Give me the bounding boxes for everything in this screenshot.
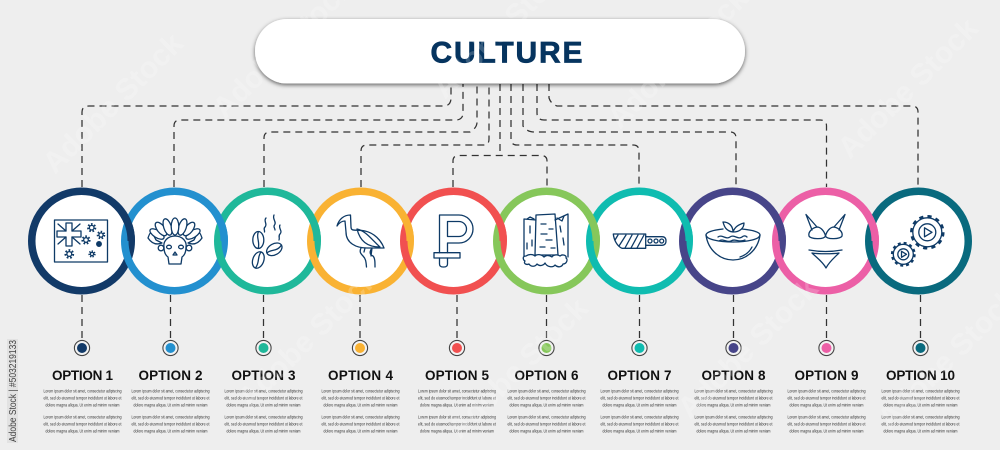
option 2: elit, sed do eiusmod tempor incididunt ut labore et (132, 395, 210, 400)
option 6: dolore magna aliqua. Ut enim ad minim veniam (510, 428, 584, 433)
option 9: elit, sed do eiusmod tempor incididunt ut labore et (788, 395, 866, 400)
faint diagonal watermarks: Adobe Stock (442, 292, 595, 445)
option 5: Lorem ipsum dolor sit amet, consectetur adipiscing (418, 388, 496, 393)
option 4: Lorem ipsum dolor sit amet, consectetur adipiscing (322, 388, 400, 393)
option 10: dolore magna aliqua. Ut enim ad minim veniam (884, 402, 958, 408)
option 6: Lorem ipsum dolor sit amet, consectetur adipiscing (508, 388, 586, 393)
option 9: OPTION 9 (794, 368, 858, 383)
option 8 (694, 340, 773, 433)
option 2: OPTION 2 (138, 368, 202, 383)
option 3 (224, 340, 303, 433)
option 4: Lorem ipsum dolor sit amet, consectetur adipiscing (322, 414, 400, 419)
option 8: elit, sed do eiusmod tempor incididunt ut labore et (694, 421, 773, 426)
option 7: dolore magna aliqua. Ut enim ad minim veniam (602, 428, 677, 433)
icon: australian flag (54, 220, 108, 262)
option 2: dolore magna aliqua. Ut enim ad minim veniam (134, 428, 208, 433)
option 5: OPTION 5 (425, 368, 489, 383)
faint diagonal watermarks: Adobe Stock (232, 262, 385, 415)
option 9: dolore magna aliqua. Ut enim ad minim veniam (790, 428, 864, 433)
icon: crane bird (337, 215, 384, 267)
option 1: Lorem ipsum dolor sit amet, consectetur adipiscing (44, 388, 122, 393)
option 10 (882, 340, 960, 433)
option 3: dolore magna aliqua. Ut enim ad minim veniam (226, 428, 301, 433)
option 6: elit, sed do eiusmod tempor incididunt ut labore et (508, 395, 586, 400)
option 5: Lorem ipsum dolor sit amet, consectetur adipiscing (418, 414, 496, 419)
option 3: dolore magna aliqua. Ut enim ad minim veniam (226, 402, 301, 408)
option 7: OPTION 7 (608, 368, 672, 383)
option 3: elit, sed do eiusmod tempor incididunt ut labore et (224, 395, 303, 400)
option 6: OPTION 6 (514, 368, 579, 383)
option 9 (788, 340, 866, 433)
option 5: elit, sed do eiusmod tempor incididunt ut labore et (418, 395, 497, 400)
icon: coffee beans with steam (250, 215, 284, 270)
option 7: Lorem ipsum dolor sit amet, consectetur adipiscing (600, 388, 679, 393)
option 7 (600, 340, 679, 433)
icon: gears with play buttons (892, 217, 943, 265)
rings (32, 191, 968, 291)
option 1: elit, sed do eiusmod tempor incididunt ut labore et (44, 395, 122, 400)
option 8: dolore magna aliqua. Ut enim ad minim veniam (696, 428, 771, 433)
option 3: Lorem ipsum dolor sit amet, consectetur adipiscing (224, 388, 303, 393)
option 2: Lorem ipsum dolor sit amet, consectetur adipiscing (132, 388, 210, 393)
option 1: OPTION 1 (52, 368, 113, 383)
option 3: OPTION 3 (232, 368, 296, 383)
icon: bowl with leaves (706, 222, 760, 260)
option 10: dolore magna aliqua. Ut enim ad minim veniam (884, 428, 958, 433)
option 10: elit, sed do eiusmod tempor incididunt ut labore et (882, 395, 960, 400)
option 10: Lorem ipsum dolor sit amet, consectetur adipiscing (882, 414, 960, 419)
option 9: dolore magna aliqua. Ut enim ad minim veniam (790, 402, 864, 408)
stock watermark text, vertical: Adobe Stock | #503219133 (7, 340, 19, 442)
option 1: dolore magna aliqua. Ut enim ad minim veniam (46, 428, 120, 433)
option 4: dolore magna aliqua. Ut enim ad minim veniam (324, 402, 398, 408)
option 6: elit, sed do eiusmod tempor incididunt ut labore et (508, 421, 586, 426)
option 8: OPTION 8 (702, 368, 766, 383)
option 7: Lorem ipsum dolor sit amet, consectetur adipiscing (600, 414, 679, 419)
icon: waterfall (523, 214, 568, 267)
option 4: OPTION 4 (328, 368, 393, 383)
icon: tribal skull with feather headdress (148, 218, 202, 264)
option 6 (508, 340, 586, 433)
option 1: dolore magna aliqua. Ut enim ad minim veniam (46, 402, 120, 408)
option 9: Lorem ipsum dolor sit amet, consectetur adipiscing (788, 388, 866, 393)
option 4: dolore magna aliqua. Ut enim ad minim veniam (324, 428, 398, 433)
option 7: dolore magna aliqua. Ut enim ad minim veniam (602, 402, 677, 408)
option 10: Lorem ipsum dolor sit amet, consectetur adipiscing (882, 388, 960, 393)
icon: ruble currency sign (434, 215, 473, 267)
faint diagonal watermarks: Adobe Stock (672, 272, 825, 425)
option 1: elit, sed do eiusmod tempor incididunt ut labore et (44, 421, 122, 426)
option 3: elit, sed do eiusmod tempor incididunt ut labore et (224, 421, 303, 426)
dashed connectors from title to options (82, 84, 920, 340)
option 6: dolore magna aliqua. Ut enim ad minim veniam (510, 402, 584, 408)
option 10: elit, sed do eiusmod tempor incididunt ut labore et (882, 421, 960, 426)
title pill (255, 19, 745, 84)
option 5: dolore magna aliqua. Ut enim ad minim veniam (420, 402, 494, 408)
option 5 (418, 340, 497, 433)
icon: knife (613, 234, 666, 248)
faint diagonal watermarks: Adobe Stock (37, 27, 190, 180)
faint diagonal watermarks: Adobe Stock (832, 12, 985, 165)
option 6: Lorem ipsum dolor sit amet, consectetur adipiscing (508, 414, 586, 419)
option 2: Lorem ipsum dolor sit amet, consectetur adipiscing (132, 414, 210, 419)
option 2 (132, 340, 210, 433)
option 2: elit, sed do eiusmod tempor incididunt ut labore et (132, 421, 210, 426)
option 8: elit, sed do eiusmod tempor incididunt ut labore et (694, 395, 773, 400)
option 2: dolore magna aliqua. Ut enim ad minim veniam (134, 402, 208, 408)
option 5: dolore magna aliqua. Ut enim ad minim veniam (420, 428, 494, 433)
option 8: Lorem ipsum dolor sit amet, consectetur adipiscing (694, 388, 773, 393)
title pill: CULTURE (430, 36, 582, 70)
option 8: dolore magna aliqua. Ut enim ad minim veniam (696, 402, 771, 408)
option 4: elit, sed do eiusmod tempor incididunt ut labore et (322, 395, 400, 400)
option 1 (44, 340, 122, 433)
icon: bikini (806, 214, 845, 268)
option 4: elit, sed do eiusmod tempor incididunt ut labore et (322, 421, 400, 426)
option 1: Lorem ipsum dolor sit amet, consectetur adipiscing (44, 414, 122, 419)
option 5: elit, sed do eiusmod tempor incididunt ut labore et (418, 421, 497, 426)
option 7: elit, sed do eiusmod tempor incididunt ut labore et (600, 421, 679, 426)
option 9: Lorem ipsum dolor sit amet, consectetur adipiscing (788, 414, 866, 419)
option 8: Lorem ipsum dolor sit amet, consectetur adipiscing (694, 414, 773, 419)
option 4 (322, 340, 400, 433)
option 7: elit, sed do eiusmod tempor incididunt ut labore et (600, 395, 679, 400)
option 3: Lorem ipsum dolor sit amet, consectetur adipiscing (224, 414, 303, 419)
option 10: OPTION 10 (886, 368, 955, 383)
option 9: elit, sed do eiusmod tempor incididunt ut labore et (788, 421, 866, 426)
